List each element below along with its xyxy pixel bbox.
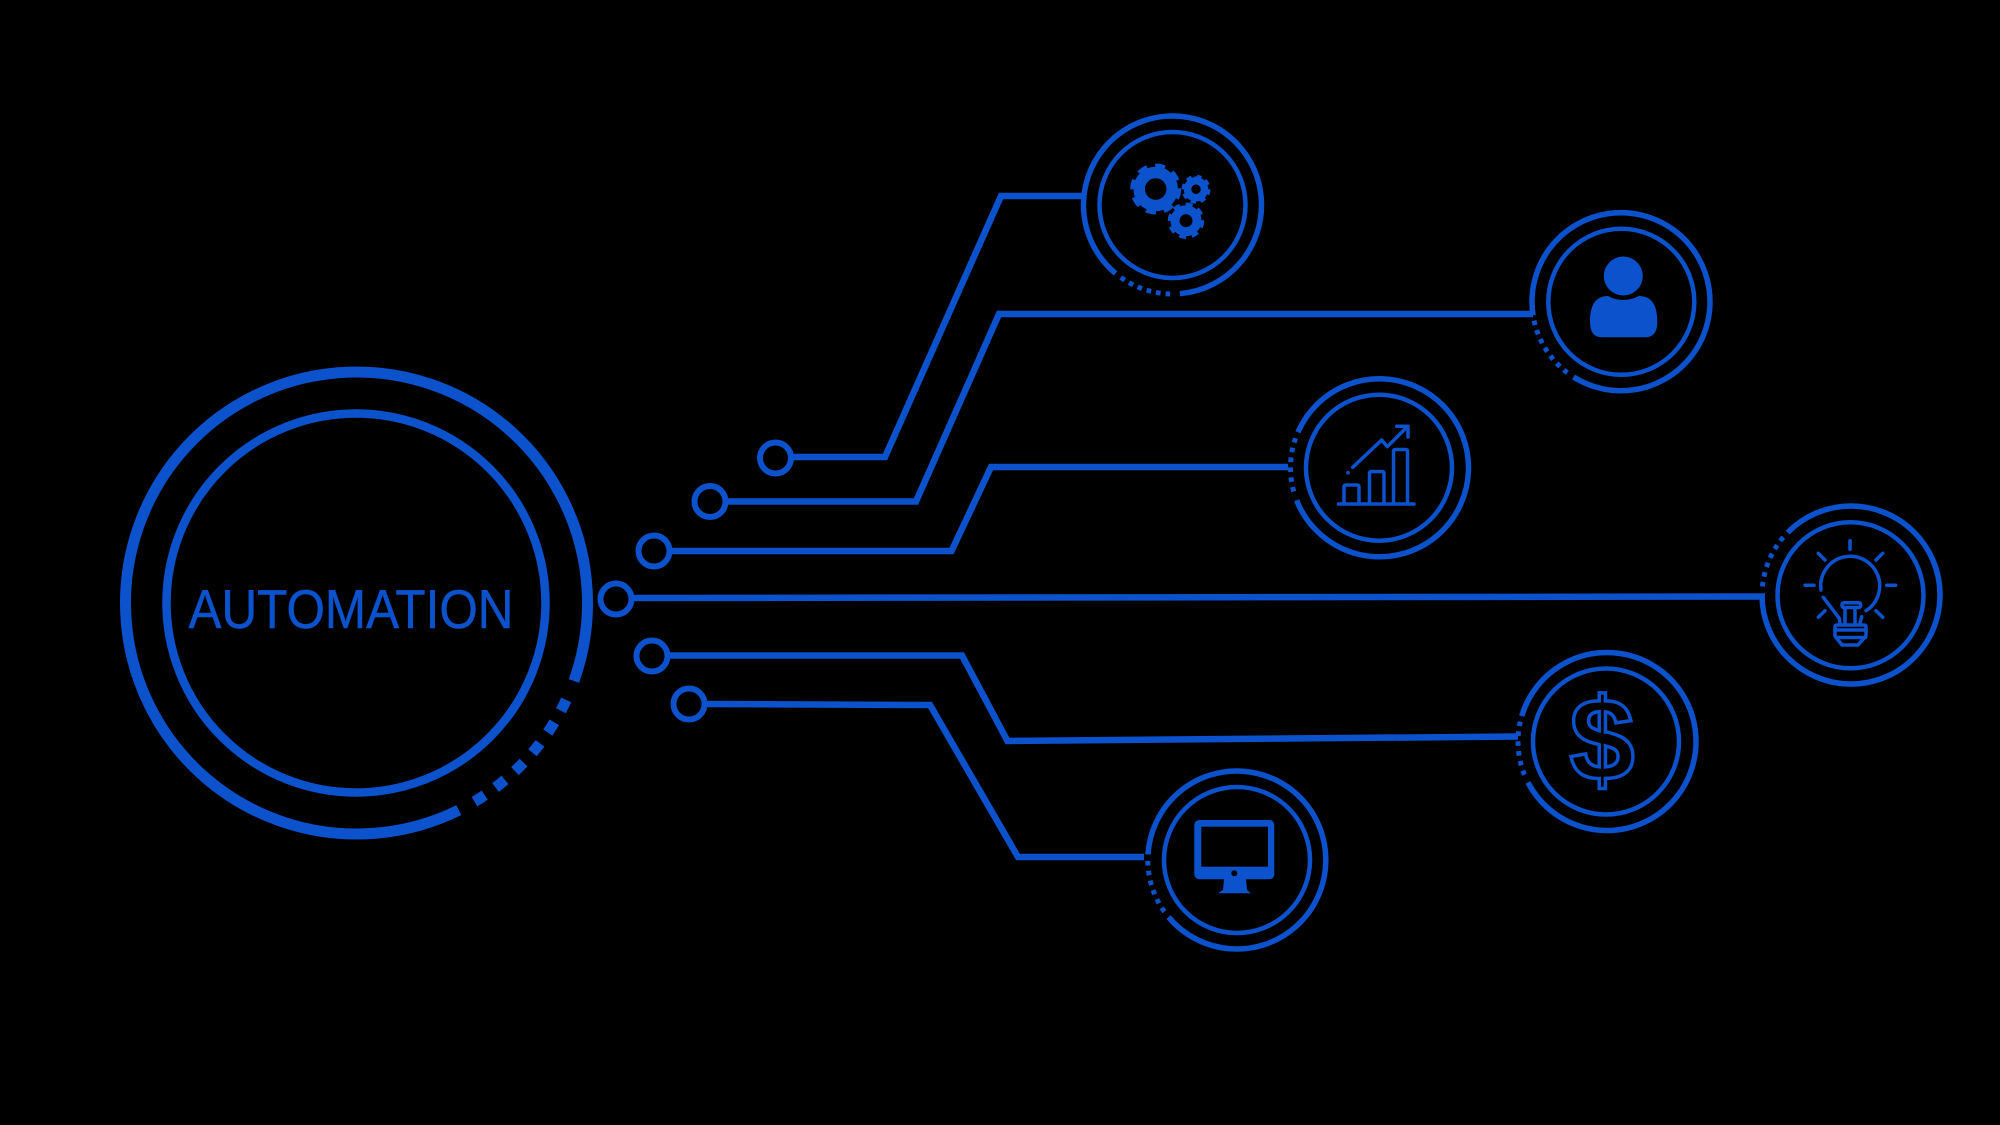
connector: light bulb — [600, 584, 1765, 614]
icon: growth chart — [1338, 426, 1414, 504]
node: monitor — [1113, 736, 1361, 984]
icon: light bulb — [1805, 541, 1896, 645]
node: light bulb — [1725, 469, 1977, 721]
node: person — [1496, 177, 1746, 426]
connector: gears — [760, 196, 1084, 474]
hub title: AUTOMATION — [188, 578, 514, 640]
hub inner ring — [166, 414, 546, 792]
connector: chart — [638, 467, 1288, 566]
hub outer ring — [47, 294, 666, 912]
connector: monitor — [674, 688, 1144, 857]
connector: dollar — [636, 640, 1518, 741]
node: gears — [1047, 80, 1298, 330]
hub ring dashes — [50, 296, 663, 910]
central hub: automation — [47, 294, 666, 912]
icon: gears — [1132, 166, 1209, 237]
icon: person — [1590, 256, 1657, 337]
icon: dollar sign: $ — [1569, 674, 1635, 805]
connector: person — [694, 314, 1533, 517]
node: dollar — [1491, 626, 1723, 857]
icon: monitor — [1194, 820, 1274, 893]
node: chart — [1262, 350, 1497, 585]
